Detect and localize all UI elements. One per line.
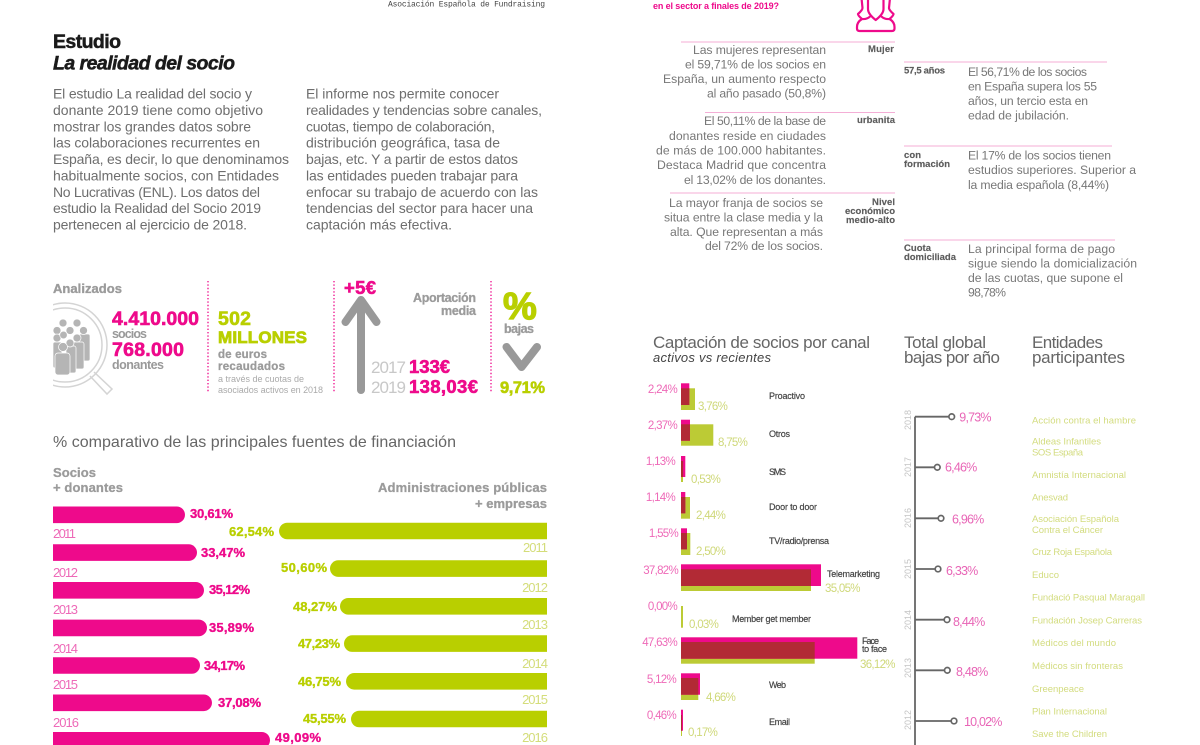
panel: cuota domiciliada: 98,78% bbox=[968, 286, 1006, 300]
panel: 502 millones: a través de cuotas de bbox=[218, 374, 304, 384]
panel: urbanita: Destaca Madrid que concentra bbox=[657, 158, 826, 172]
panel: bajas: % bbox=[503, 286, 537, 328]
timeline chart: bajas por año: 10,02% bbox=[964, 715, 1002, 729]
panel: 502 millones: asociados activos en 2018 bbox=[218, 385, 323, 395]
bar chart: captacion por canal: Member get member bbox=[732, 614, 811, 624]
panel: aportacion media: 2017 bbox=[371, 358, 406, 377]
stat: socios: 4.410.000 bbox=[112, 308, 199, 330]
bar chart: captacion por canal bbox=[642, 383, 895, 739]
bar chart: administraciones publicas + empresas: Administraciones públicas bbox=[378, 480, 547, 495]
arrow: down bbox=[506, 347, 537, 367]
panel: mujer: Las mujeres representan bbox=[693, 43, 826, 57]
bar chart: captacion por canal: 37,82% bbox=[643, 565, 678, 577]
bar chart: administraciones publicas + empresas: 50,60% bbox=[281, 560, 327, 575]
text block: intro right: bajas, etc. Y a partir de estos datos bbox=[306, 151, 518, 167]
panel: urbanita: El 50,11% de la base de bbox=[704, 114, 826, 128]
text block: intro left: mostrar los grandes datos sobre bbox=[53, 118, 251, 134]
bar chart: administraciones publicas + empresas: 2015 bbox=[522, 692, 548, 707]
bar chart: captacion por canal: 5,12% bbox=[647, 674, 676, 686]
panel: con formacion: con bbox=[904, 150, 921, 161]
list: entidades participantes: Contra el Cáncer bbox=[1032, 525, 1103, 536]
bar chart: captacion por canal: to face bbox=[862, 644, 887, 654]
panel: nivel economico: situa entre la clase media y la bbox=[664, 210, 823, 224]
text block: intro right: captación más efectiva. bbox=[306, 216, 452, 232]
text block: intro right: realidades y tendencias sobre canales, bbox=[306, 102, 542, 118]
panel: con formacion: formación bbox=[904, 159, 950, 170]
bar chart: socios + donantes: 2011 bbox=[53, 526, 76, 541]
panel: con formacion: estudios superiores. Superior a bbox=[968, 163, 1136, 177]
bar chart: captacion por canal: 4,66% bbox=[706, 692, 736, 704]
heading: total global bajas bbox=[904, 333, 1000, 367]
heading: entidades participantes: Entidades bbox=[1032, 333, 1103, 352]
text block: intro right bbox=[306, 86, 542, 232]
bar chart: socios + donantes: 2014 bbox=[53, 641, 78, 656]
bar chart: administraciones publicas + empresas: 62,54% bbox=[229, 524, 274, 539]
bar chart: socios + donantes: 2015 bbox=[53, 677, 78, 692]
bar chart: socios + donantes: 34,17% bbox=[204, 658, 245, 673]
bar chart: administraciones publicas + empresas: 2012 bbox=[522, 580, 548, 595]
timeline chart: bajas por año: 6,46% bbox=[945, 460, 977, 474]
list: entidades participantes: Cruz Roja Española bbox=[1032, 547, 1113, 558]
panel: 502 millones: 502 bbox=[218, 308, 251, 330]
panel: urbanita: el 13,02% de los donantes. bbox=[684, 173, 826, 187]
bar chart: captacion por canal: 0,00% bbox=[648, 601, 677, 613]
panel: con formacion bbox=[904, 146, 1136, 192]
text block: intro left: donante 2019 tiene como objetivo bbox=[53, 102, 263, 118]
heading: captacion bbox=[653, 333, 870, 365]
timeline chart: bajas por año: 2016 bbox=[903, 508, 913, 528]
text block: intro left bbox=[53, 86, 289, 232]
bar chart: captacion por canal: 1,55% bbox=[649, 528, 678, 540]
bar chart: captacion por canal: 2,50% bbox=[696, 546, 726, 558]
dotted divider 2 bbox=[333, 281, 335, 393]
list: entidades participantes: Aldeas Infantiles bbox=[1032, 436, 1101, 448]
text block: intro right: cuotas, tiempo de colaboración, bbox=[306, 118, 495, 134]
panel: aportacion media: Aportación bbox=[413, 291, 476, 305]
title bbox=[53, 31, 235, 74]
list: entidades participantes: Fundació Pasqual Maragall bbox=[1032, 592, 1145, 604]
bar chart: captacion por canal: 35,05% bbox=[825, 583, 860, 595]
panel: 502 millones: de euros bbox=[218, 349, 267, 361]
panel: 502 millones bbox=[218, 308, 323, 395]
stat: socios: socios bbox=[112, 327, 147, 341]
list: entidades participantes: Plan Internacional bbox=[1032, 706, 1107, 718]
bar chart: captacion por canal: 2,37% bbox=[648, 420, 677, 432]
panel: urbanita: donantes reside en ciudades bbox=[669, 129, 826, 143]
title: La realidad del socio bbox=[53, 52, 235, 74]
text block: intro left: España, es decir, lo que denominamos bbox=[53, 151, 289, 167]
bar chart: captacion por canal: 0,17% bbox=[688, 727, 718, 739]
bar chart: administraciones publicas + empresas: 46,75% bbox=[298, 674, 341, 689]
list: entidades participantes: Asociación Española bbox=[1032, 514, 1120, 525]
bar chart: socios + donantes: 2013 bbox=[53, 602, 78, 617]
bar chart: captacion por canal: SMS bbox=[769, 467, 786, 477]
list: entidades participantes: Anesvad bbox=[1032, 492, 1068, 504]
dotted divider 3 bbox=[490, 281, 492, 393]
panel: cuota domiciliada: Cuota bbox=[904, 243, 932, 254]
stat: donantes: donantes bbox=[112, 358, 164, 372]
panel: mujer: al año pasado (50,8%) bbox=[707, 86, 826, 100]
text block: intro left: habitualmente socios, con Entidades bbox=[53, 167, 279, 183]
panel: 502 millones: recaudados bbox=[218, 361, 285, 373]
panel: nivel economico bbox=[664, 193, 895, 253]
list: entidades participantes: Fundación Josep Carreras bbox=[1032, 616, 1142, 626]
timeline chart: bajas por año: 2017 bbox=[903, 457, 913, 477]
bar chart: captacion por canal: 8,75% bbox=[718, 437, 748, 449]
timeline chart: bajas por año bbox=[903, 410, 1002, 745]
bar chart: socios + donantes: 2016 bbox=[53, 715, 79, 730]
bar chart: captacion por canal: 0,03% bbox=[689, 619, 719, 631]
bar chart: captacion por canal: 3,76% bbox=[698, 401, 728, 413]
panel: mujer: el 59,71% de los socios en bbox=[685, 58, 826, 72]
bar chart: captacion por canal: 1,14% bbox=[646, 492, 675, 504]
dotted divider 1 bbox=[207, 281, 209, 393]
panel: con formacion: El 17% de los socios tienen bbox=[968, 148, 1111, 162]
heading: comparativo: % comparativo de las principales fuentes de financiación bbox=[53, 434, 456, 451]
bar chart: captacion por canal: Otros bbox=[769, 429, 790, 439]
panel: bajas bbox=[500, 286, 545, 397]
arrow: up bbox=[346, 300, 376, 390]
panel: nivel economico: alta. Que representan a más bbox=[670, 225, 823, 239]
title: Estudio bbox=[53, 31, 121, 53]
panel: urbanita bbox=[656, 112, 896, 187]
panel: 502 millones: MILLONES bbox=[218, 328, 307, 347]
timeline chart: bajas por año: 2015 bbox=[903, 559, 913, 579]
bar chart: captacion por canal: 1,13% bbox=[646, 456, 675, 468]
timeline chart: bajas por año: 8,44% bbox=[953, 615, 985, 629]
bar chart: captacion por canal: Face bbox=[862, 636, 879, 646]
panel: aportacion media: 133€ bbox=[409, 356, 450, 377]
timeline chart: bajas por año: 2014 bbox=[903, 610, 913, 630]
list: entidades participantes: Acción contra el hambre bbox=[1032, 416, 1136, 426]
heading: entidades participantes bbox=[1032, 333, 1125, 367]
panel: 57,5 años bbox=[904, 62, 1107, 122]
bar chart: captacion por canal: Proactivo bbox=[769, 391, 805, 401]
timeline chart: bajas por año: 8,48% bbox=[956, 665, 988, 679]
panel: aportacion media bbox=[344, 277, 478, 397]
bar chart: administraciones publicas + empresas bbox=[229, 480, 548, 745]
panel: analizados: Analizados bbox=[53, 281, 122, 296]
list: entidades participantes: Médicos sin fronteras bbox=[1032, 661, 1123, 672]
text block: intro right: El informe nos permite conocer bbox=[306, 86, 499, 102]
header: organisation name: Asociación Española de Fundraising bbox=[388, 0, 545, 10]
panel: 57,5 años: 57,5 años bbox=[904, 66, 945, 76]
bar chart: administraciones publicas + empresas: 48,27% bbox=[293, 599, 337, 614]
panel: cuota domiciliada bbox=[904, 240, 1137, 300]
panel: urbanita: urbanita bbox=[857, 115, 896, 126]
bar chart: administraciones publicas + empresas: 2016 bbox=[522, 730, 548, 745]
panel: cuota domiciliada: sigue siendo la domicialización bbox=[968, 256, 1137, 270]
panel: nivel economico: medio-alto bbox=[846, 215, 895, 226]
panel: cuota domiciliada: de las cuotas, que supone el bbox=[968, 271, 1123, 285]
text block: intro right: distribución geográfica, tasa de bbox=[306, 135, 500, 151]
text block: intro left: estudio la Realidad del Socio 2019 bbox=[53, 200, 261, 216]
bar chart: socios + donantes: 30,61% bbox=[190, 506, 233, 521]
bar chart: administraciones publicas + empresas: 2013 bbox=[522, 617, 548, 632]
list: entidades participantes: Amnistía Internacional bbox=[1032, 470, 1126, 481]
bar chart: captacion por canal: Email bbox=[769, 717, 790, 727]
heading: total global bajas: bajas por año bbox=[904, 348, 1000, 367]
bar chart: captacion por canal: 0,53% bbox=[691, 474, 721, 486]
timeline chart: bajas por año: 2012 bbox=[903, 710, 913, 730]
bar chart: socios + donantes: 2012 bbox=[53, 565, 78, 580]
panel: mujer: España, un aumento respecto bbox=[663, 72, 826, 86]
list: entidades participantes: SOS España bbox=[1032, 448, 1084, 458]
panel: 57,5 años: en España supera los 55 bbox=[968, 80, 1097, 94]
panel: mujer bbox=[663, 42, 895, 100]
bar chart: socios + donantes bbox=[53, 465, 321, 745]
text block: intro left: El estudio La realidad del socio y bbox=[53, 86, 252, 102]
panel: aportacion media: 138,03€ bbox=[409, 376, 478, 397]
panel: bajas: 9,71% bbox=[500, 379, 545, 397]
bar chart: socios + donantes: 37,08% bbox=[218, 695, 261, 710]
heading: total global bajas: Total global bbox=[904, 333, 986, 352]
list: entidades participantes: Save the Children bbox=[1032, 729, 1107, 740]
list: entidades participantes bbox=[1032, 416, 1145, 740]
panel: 57,5 años: años, un tercio esta en bbox=[968, 94, 1088, 108]
list: entidades participantes: Médicos del mundo bbox=[1032, 638, 1116, 649]
bar chart: captacion por canal: 2,24% bbox=[648, 384, 677, 396]
bar chart: socios + donantes: 49,09% bbox=[275, 730, 321, 745]
list: entidades participantes: Educo bbox=[1032, 570, 1059, 581]
timeline chart: bajas por año: 6,96% bbox=[952, 512, 984, 526]
text block: intro right: tendencias del sector para hacer una bbox=[306, 200, 533, 216]
bar chart: captacion por canal: 2,44% bbox=[696, 510, 726, 522]
panel: aportacion media: +5€ bbox=[344, 277, 376, 298]
heading: captacion: Captación de socios por canal bbox=[653, 333, 870, 352]
text block: intro left: las colaboraciones recurrentes en bbox=[53, 135, 260, 151]
panel: 57,5 años: El 56,71% de los socios bbox=[968, 65, 1087, 79]
panel: cuota domiciliada: La principal forma de pago bbox=[968, 242, 1115, 256]
list: entidades participantes: Greenpeace bbox=[1032, 684, 1084, 695]
panel: 57,5 años: edad de jubilación. bbox=[968, 108, 1069, 122]
icon: woman bbox=[857, 0, 894, 31]
text block: intro left: No Lucrativas (ENL). Los datos del bbox=[53, 184, 260, 200]
stat: donantes bbox=[112, 339, 184, 372]
panel: aportacion media: media bbox=[441, 304, 477, 318]
bar chart: administraciones publicas + empresas: + empresas bbox=[475, 496, 547, 511]
bar chart: captacion por canal: 47,63% bbox=[642, 637, 677, 649]
panel: nivel economico: La mayor franja de socios se bbox=[669, 196, 823, 210]
stat: socios bbox=[112, 308, 199, 341]
bar chart: administraciones publicas + empresas: 2011 bbox=[523, 540, 548, 555]
bar chart: captacion por canal: Web bbox=[769, 680, 786, 690]
panel: con formacion: la media española (8,44%) bbox=[968, 178, 1109, 192]
bar chart: socios + donantes: Socios bbox=[53, 465, 96, 480]
bar chart: socios + donantes: 35,12% bbox=[209, 582, 250, 597]
panel: cuota domiciliada: domiciliada bbox=[904, 252, 957, 263]
panel: urbanita: de más de 100.000 habitantes. bbox=[656, 144, 826, 158]
bar chart: administraciones publicas + empresas: 47,23% bbox=[298, 636, 340, 651]
bar chart: captacion por canal: TV/radio/prensa bbox=[769, 536, 829, 546]
heading: entidades participantes: participantes bbox=[1032, 348, 1125, 367]
timeline chart: bajas por año: 9,73% bbox=[959, 410, 991, 424]
icon: magnifier with people bbox=[53, 302, 113, 395]
bar chart: captacion por canal: 36,12% bbox=[860, 659, 895, 671]
bar chart: captacion por canal: 0,46% bbox=[647, 710, 676, 722]
stat: donantes: 768.000 bbox=[112, 339, 184, 361]
heading: captacion: activos vs recientes bbox=[653, 350, 772, 365]
bar chart: socios + donantes: 33,47% bbox=[201, 545, 245, 560]
bar chart: administraciones publicas + empresas: 45,55% bbox=[303, 711, 346, 726]
bar chart: administraciones publicas + empresas: 2014 bbox=[522, 656, 548, 671]
panel: mujer: Mujer bbox=[868, 44, 894, 55]
timeline chart: bajas por año: 6,33% bbox=[946, 564, 978, 578]
panel: nivel economico: Nivel bbox=[872, 197, 895, 208]
panel: bajas: bajas bbox=[504, 322, 534, 336]
timeline chart: bajas por año: 2018 bbox=[903, 410, 913, 430]
text block: intro left: pertenecen al ejercicio de 2018. bbox=[53, 216, 247, 232]
panel: aportacion media: 2019 bbox=[371, 378, 406, 397]
bar chart: captacion por canal: Telemarketing bbox=[827, 569, 880, 579]
panel: nivel economico: económico bbox=[845, 206, 895, 217]
text block: intro right: enfocar su trabajo de acuerdo con las bbox=[306, 184, 538, 200]
timeline chart: bajas por año: 2013 bbox=[903, 658, 913, 678]
text block: intro right: las entidades pueden trabajar para bbox=[306, 167, 518, 183]
bar chart: captacion por canal: Door to door bbox=[769, 502, 817, 512]
panel: analizados bbox=[53, 283, 198, 395]
bar chart: socios + donantes: 35,89% bbox=[209, 620, 254, 635]
panel: nivel economico: del 72% de los socios. bbox=[705, 239, 823, 253]
heading: perfil del sector: en el sector a finales de 2019? bbox=[653, 1, 779, 11]
bar chart: socios + donantes: + donantes bbox=[53, 480, 123, 495]
